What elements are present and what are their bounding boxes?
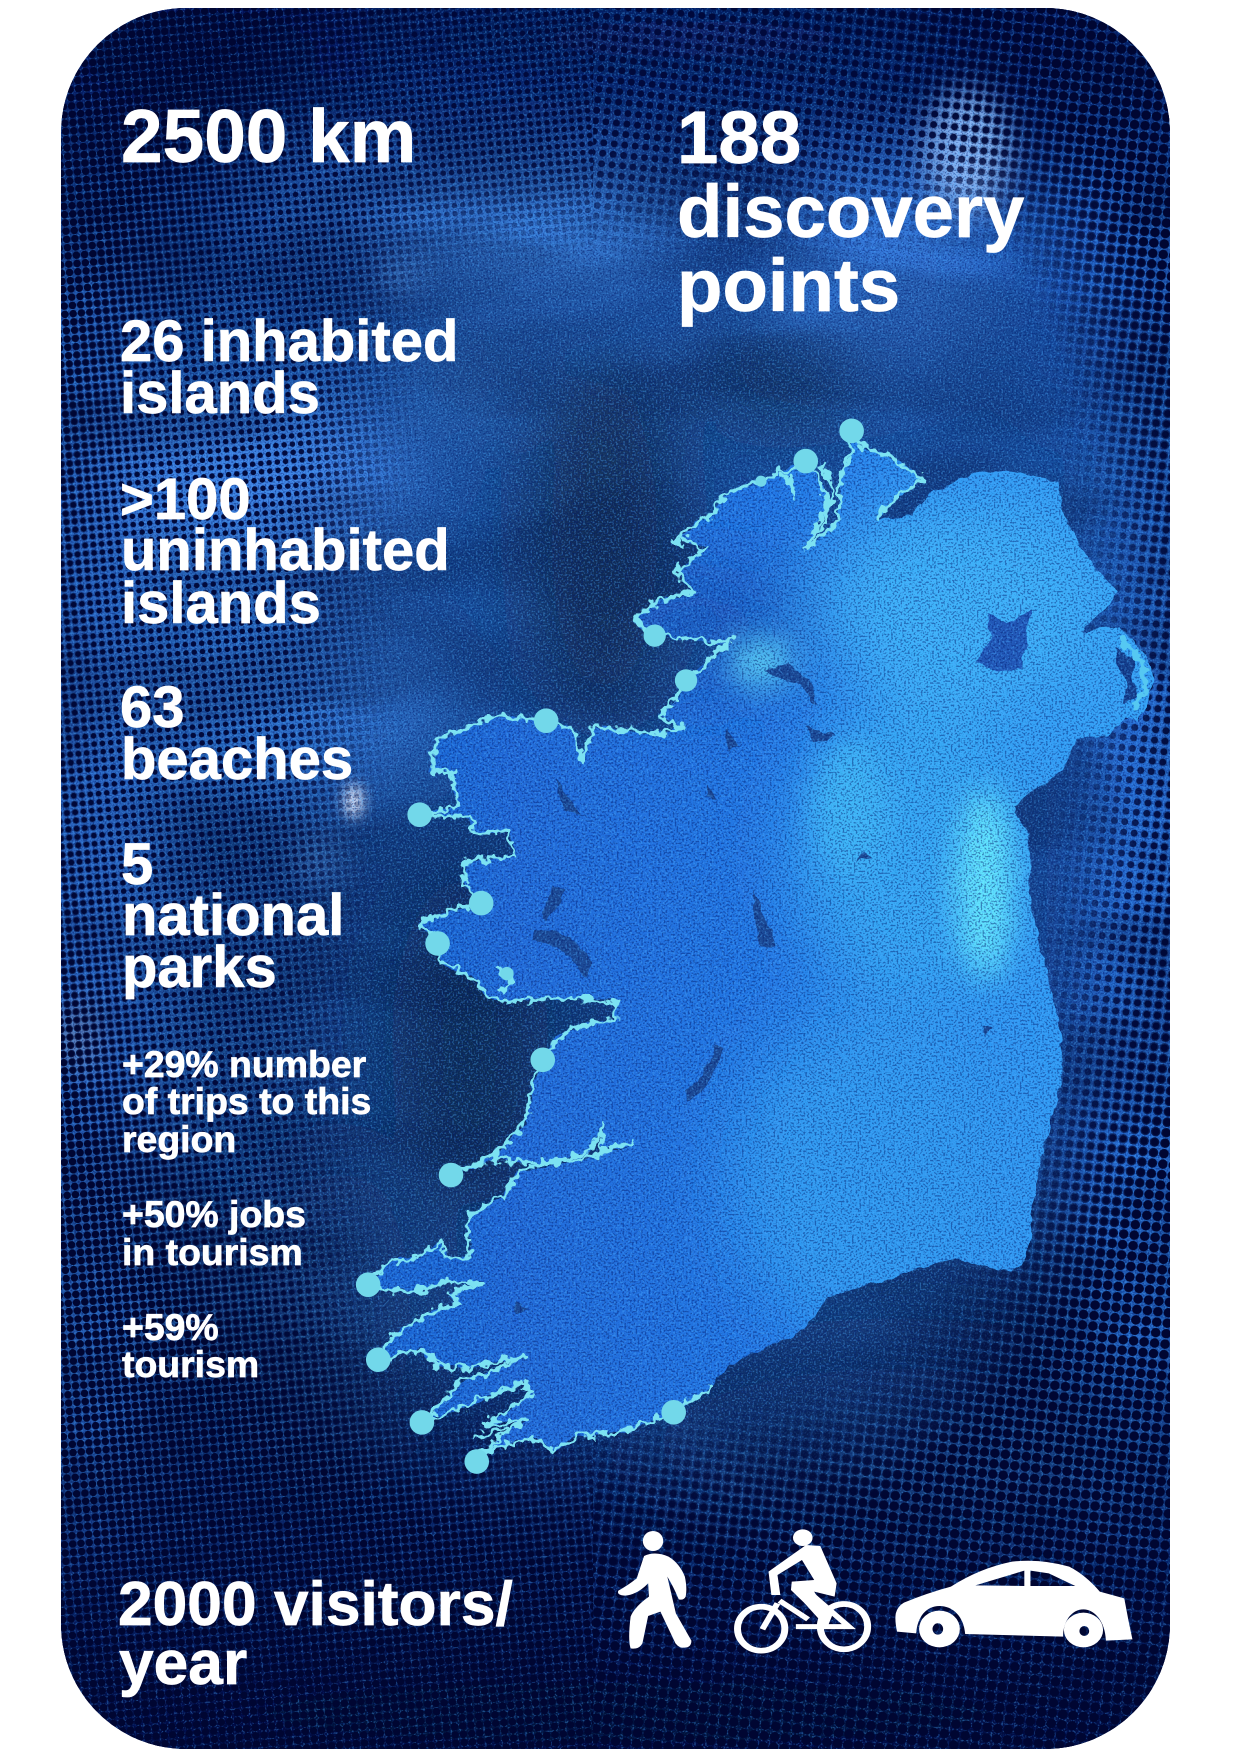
stat: inhabited islands: 26 inhabited — [120, 309, 458, 374]
heading: discovery points: discovery — [677, 170, 1024, 253]
west coastline — [368, 431, 1146, 1462]
stat: national parks: 5 — [121, 832, 153, 897]
stat: visitors per year: 2000 visitors/ — [118, 1570, 513, 1639]
stat: uninhabited islands: >100 — [120, 467, 251, 532]
stat: uninhabited islands — [120, 467, 450, 636]
stat: tourism jobs: +50% jobs — [122, 1193, 306, 1235]
heading: discovery points — [677, 96, 1024, 327]
stat: beaches — [120, 675, 353, 792]
icon: cyclist — [737, 1529, 868, 1651]
stat: uninhabited islands: islands — [121, 571, 321, 636]
icons: walking, cycling, driving — [618, 1529, 1132, 1651]
stat: tourism growth: tourism — [122, 1343, 259, 1385]
lakes and loughs — [515, 610, 1137, 1312]
heading: discovery points: 188 — [677, 96, 801, 179]
map: island with lakes and coastline — [372, 440, 1154, 1454]
discovery point markers — [356, 419, 864, 1474]
stat: trips growth: region — [122, 1118, 236, 1160]
stat: national parks — [121, 832, 344, 1000]
heading: route length: 2500 km — [121, 94, 416, 178]
land mass — [377, 442, 1154, 1451]
icon: car — [895, 1561, 1132, 1647]
stat: inhabited islands — [120, 309, 458, 426]
stat: visitors per year: year — [119, 1629, 247, 1698]
stat: trips growth: of trips to this — [122, 1080, 371, 1122]
stat: uninhabited islands: uninhabited — [121, 518, 450, 583]
heading: discovery points: points — [677, 244, 900, 327]
stat: tourism growth: +59% — [122, 1306, 219, 1348]
land grain — [376, 442, 1152, 1451]
stat: national parks: parks — [122, 935, 277, 1000]
stat: visitors per year — [118, 1570, 513, 1698]
stat: trips growth: +29% number — [122, 1043, 366, 1085]
stat: national parks: national — [122, 883, 344, 948]
stat: tourism jobs — [122, 1193, 306, 1273]
stat: beaches: beaches — [121, 727, 353, 792]
stat: tourism growth — [122, 1306, 259, 1385]
stat: inhabited islands: islands — [120, 361, 320, 426]
stat: beaches: 63 — [120, 675, 185, 740]
icon: walker — [618, 1531, 691, 1649]
stat: trips growth — [122, 1043, 371, 1160]
stat: tourism jobs: in tourism — [122, 1231, 303, 1273]
